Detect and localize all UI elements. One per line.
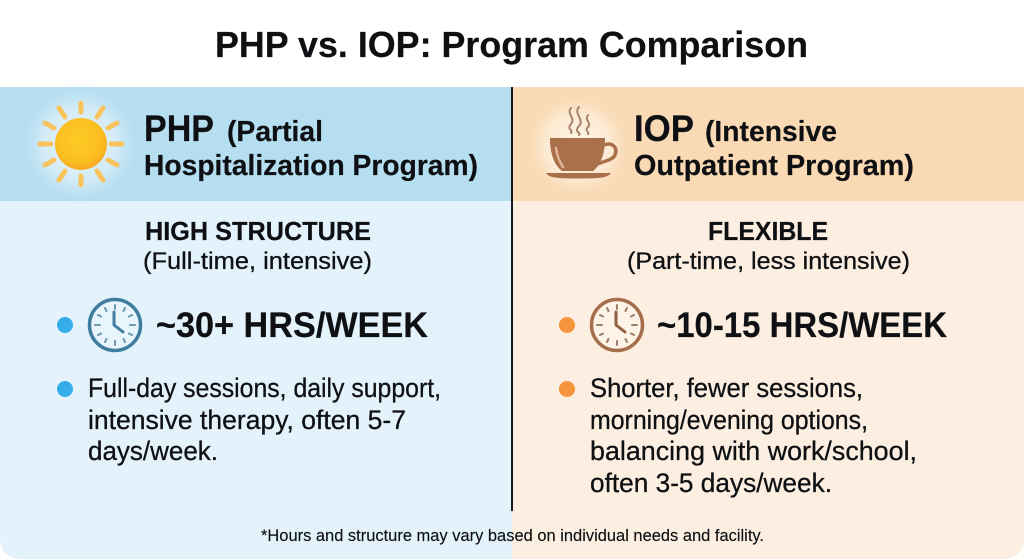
panel: IOP [512, 87, 1024, 559]
title: PHP vs. IOP: Program Comparison [215, 24, 808, 65]
panel: PHP [0, 82, 512, 559]
PHP heading: (Partial [227, 116, 323, 148]
PHP hours row [57, 300, 428, 350]
icon: coffee cup [522, 90, 634, 202]
IOP description [559, 373, 917, 498]
IOP hours row [559, 300, 947, 350]
center divider [511, 87, 513, 511]
PHP heading [144, 108, 478, 182]
IOP structure label [627, 216, 910, 275]
footnote: *Hours and structure may vary based on individual needs and facility. [261, 526, 764, 545]
PHP header band [0, 87, 512, 201]
IOP structure label: FLEXIBLE [708, 216, 828, 246]
icon: sun [18, 82, 142, 206]
PHP structure label: (Full-time, intensive) [143, 248, 372, 275]
IOP hours row: ~10-15 HRS/WEEK [657, 306, 947, 345]
PHP description [57, 373, 441, 466]
IOP description: Shorter, fewer sessions, [590, 373, 863, 403]
IOP header band [512, 87, 1024, 201]
IOP description: balancing with work/school, [590, 436, 917, 466]
PHP description: days/week. [88, 436, 218, 466]
icon: clock [592, 300, 642, 350]
IOP structure label: (Part-time, less intensive) [627, 248, 910, 275]
icon: clock [90, 300, 140, 350]
PHP structure label [143, 216, 372, 275]
IOP description: morning/evening options, [590, 405, 868, 435]
PHP hours row: ~30+ HRS/WEEK [156, 306, 428, 345]
IOP heading: IOP [634, 108, 694, 149]
PHP heading: Hospitalization Program) [144, 150, 478, 182]
PHP description: Full-day sessions, daily support, [88, 373, 441, 403]
PHP structure label: HIGH STRUCTURE [145, 216, 371, 246]
IOP heading [634, 108, 914, 182]
PHP heading: PHP [144, 108, 214, 149]
PHP description: intensive therapy, often 5-7 [88, 405, 406, 435]
IOP heading: Outpatient Program) [634, 150, 914, 182]
IOP heading: (Intensive [705, 116, 837, 148]
IOP description: often 3-5 days/week. [590, 468, 832, 498]
